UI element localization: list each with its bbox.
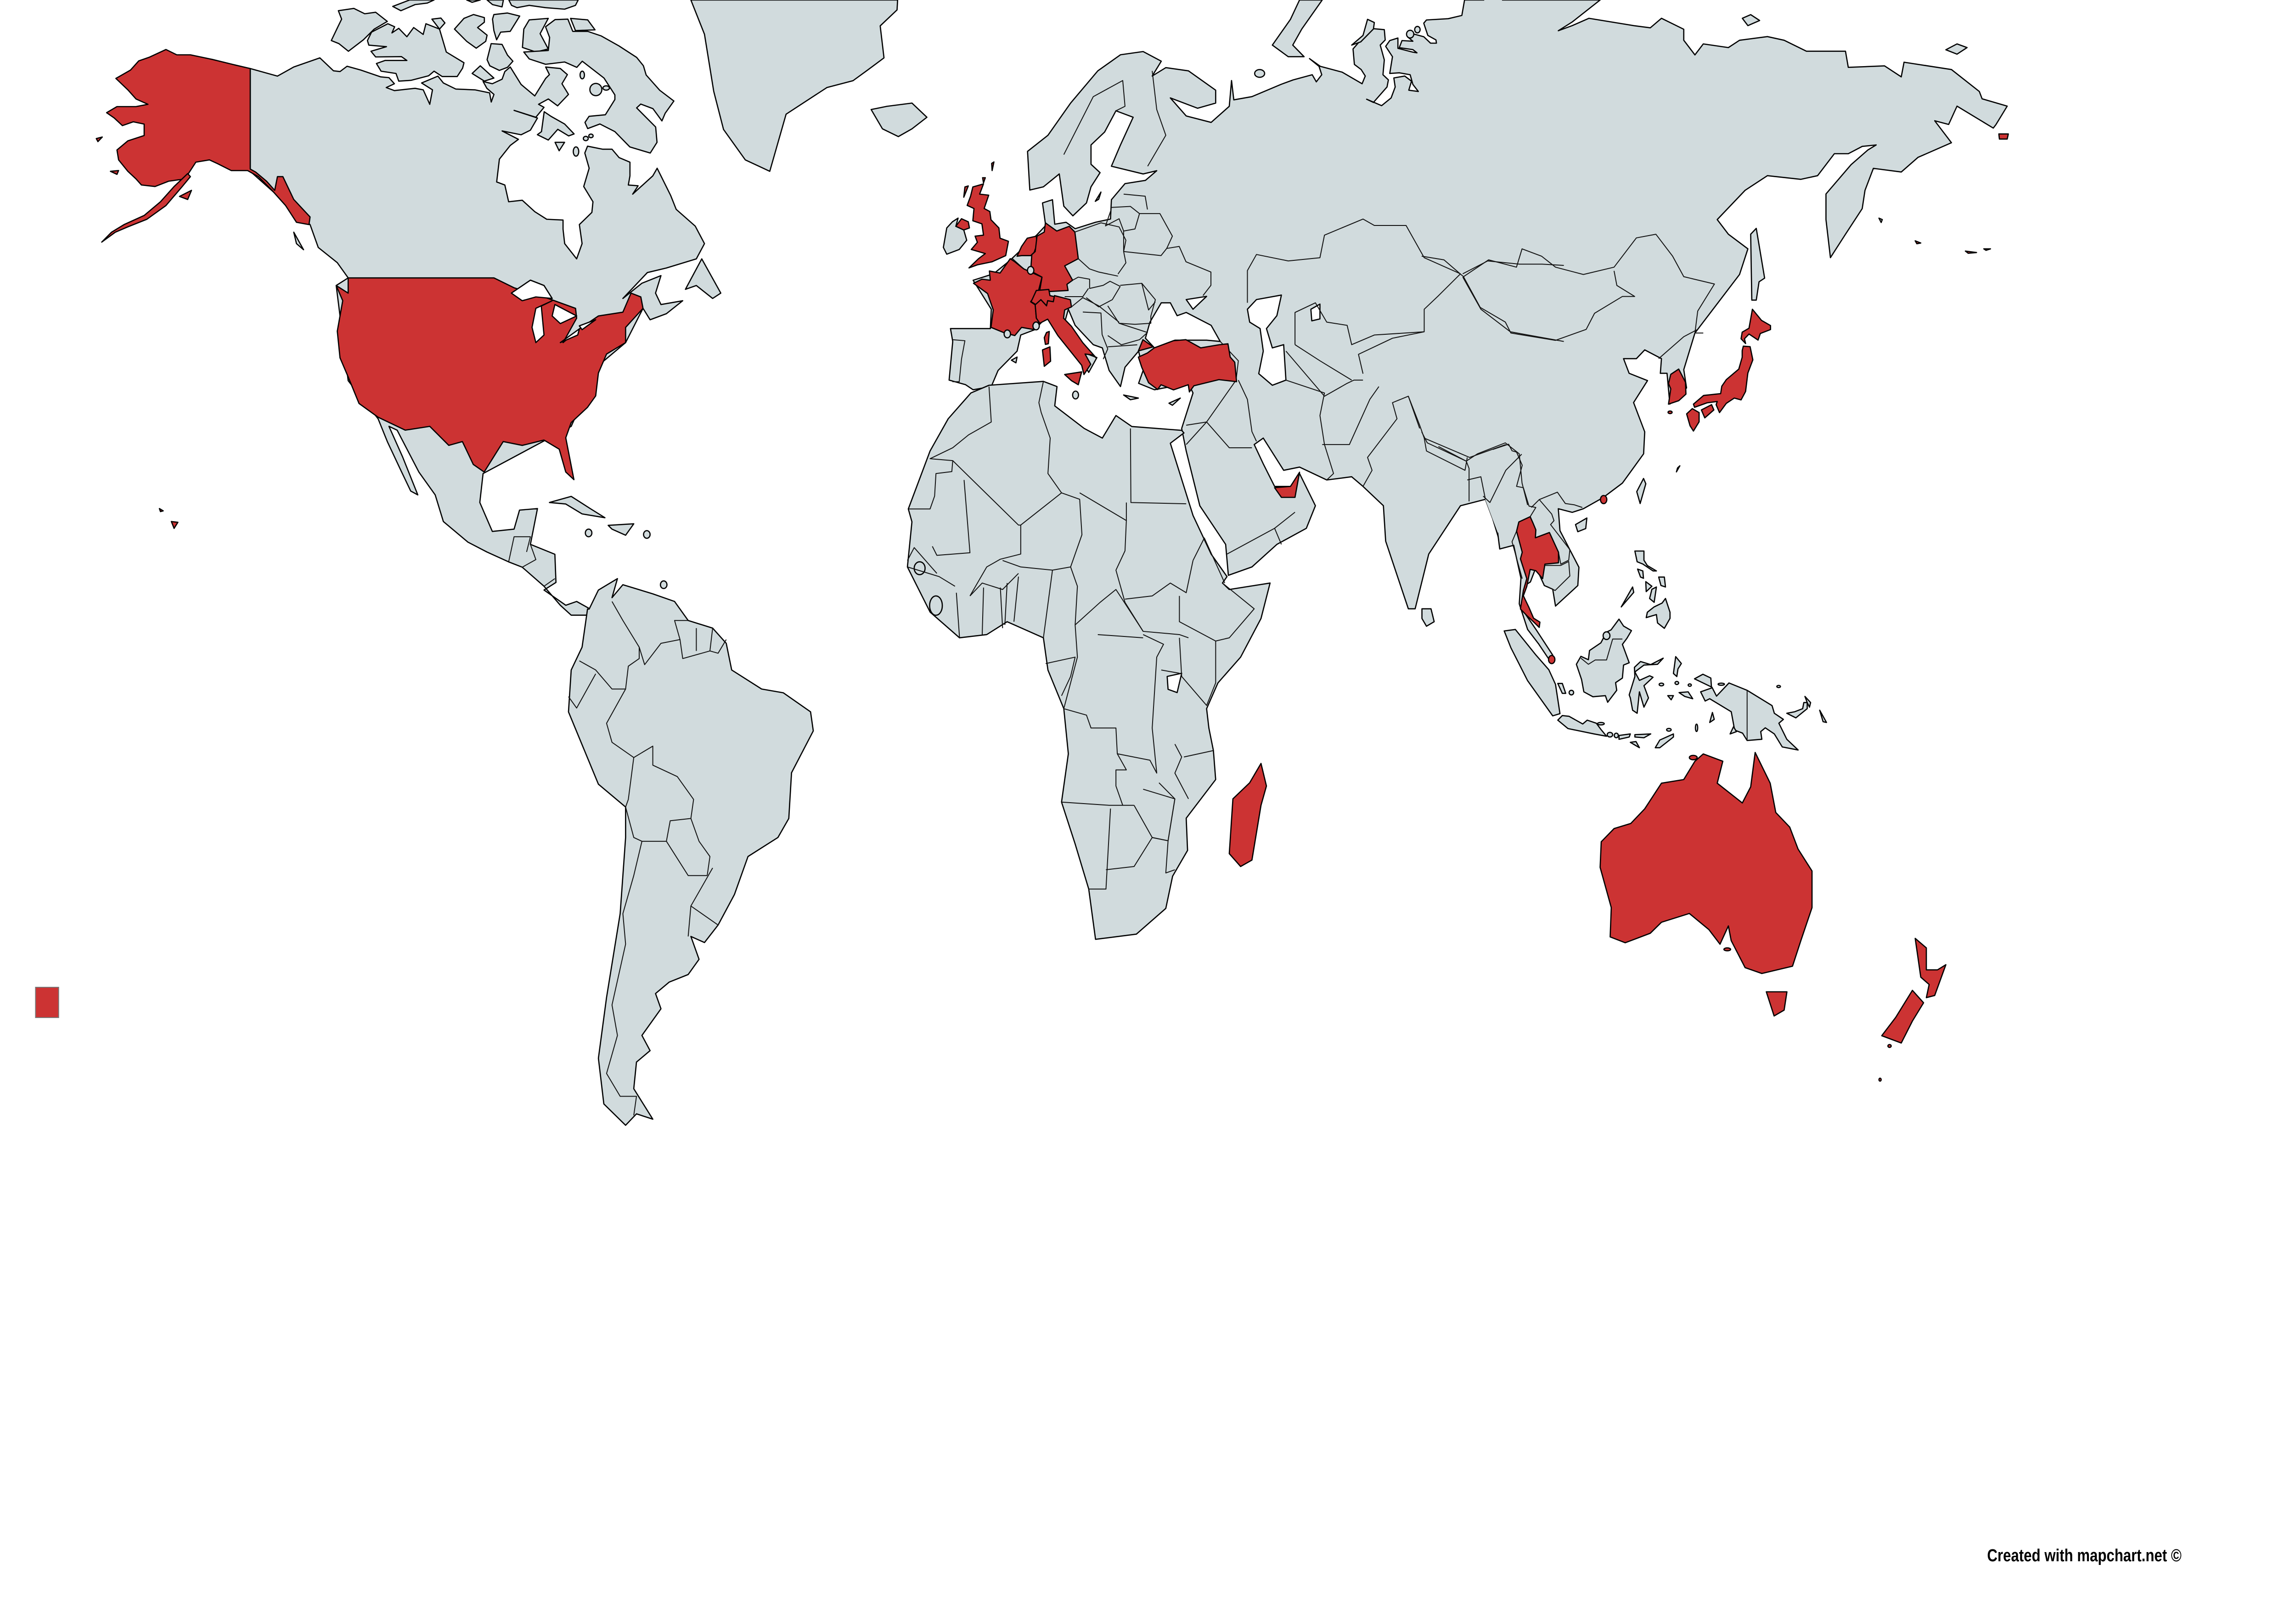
legend swatch — [35, 987, 59, 1018]
land: western Eurasia and Africa — [871, 0, 1498, 940]
borders: East and Southeast Asia — [1422, 234, 1715, 505]
Black Sea, Caspian Sea, Aral Sea and Lake Victoria — [914, 295, 1320, 692]
land: Canadian Arctic islands — [331, 0, 674, 156]
borders: North and South America — [509, 537, 726, 1115]
borders: Africa and Asia — [907, 71, 1564, 889]
borders: Indochina — [1493, 444, 1582, 591]
borders: Borneo and New Guinea — [1581, 639, 1747, 741]
countries: Australia and New Zealand, plus Aleutian outliers — [1600, 134, 2009, 1081]
country: Switzerland — [1031, 289, 1054, 306]
country: France — [974, 259, 1049, 344]
borders: Europe — [952, 194, 1211, 382]
countries: United Kingdom, France, Germany, Netherlands, Switzerland, Italy, Turkey — [943, 162, 1237, 405]
countries: South Korea, Japan, Thailand, Hong Kong, Singapore — [1517, 309, 1771, 664]
countries: United Arab Emirates and Madagascar — [1229, 472, 1300, 867]
seas and lakes — [512, 280, 1320, 692]
Great Lakes — [512, 280, 596, 343]
highlighted countries — [96, 50, 2009, 1081]
country: United Kingdom — [956, 162, 1008, 268]
land: East Asia, Russian Far East and Pacific islands — [1487, 0, 2007, 716]
land: Taiwan and Hainan — [1576, 478, 1646, 532]
land: North America, Greenland and South America — [250, 0, 898, 1125]
country: United States with Alaska and Hawaii — [96, 50, 643, 529]
country borders — [509, 71, 1747, 1115]
country: Italy — [1035, 296, 1097, 385]
map: world land base — [250, 0, 2007, 1125]
microstates and island markers — [1004, 192, 1180, 405]
country: Netherlands — [1017, 236, 1037, 256]
land: Ireland — [943, 218, 967, 254]
land cover: joins the two Eurasia outlines — [1484, 0, 1502, 533]
country: Turkey — [1138, 340, 1237, 392]
country: Germany — [1030, 223, 1078, 292]
land: Southeast Asian and Melanesian islands — [1558, 551, 1827, 750]
credit text: Created with mapchart.net © — [1987, 1546, 2182, 1565]
